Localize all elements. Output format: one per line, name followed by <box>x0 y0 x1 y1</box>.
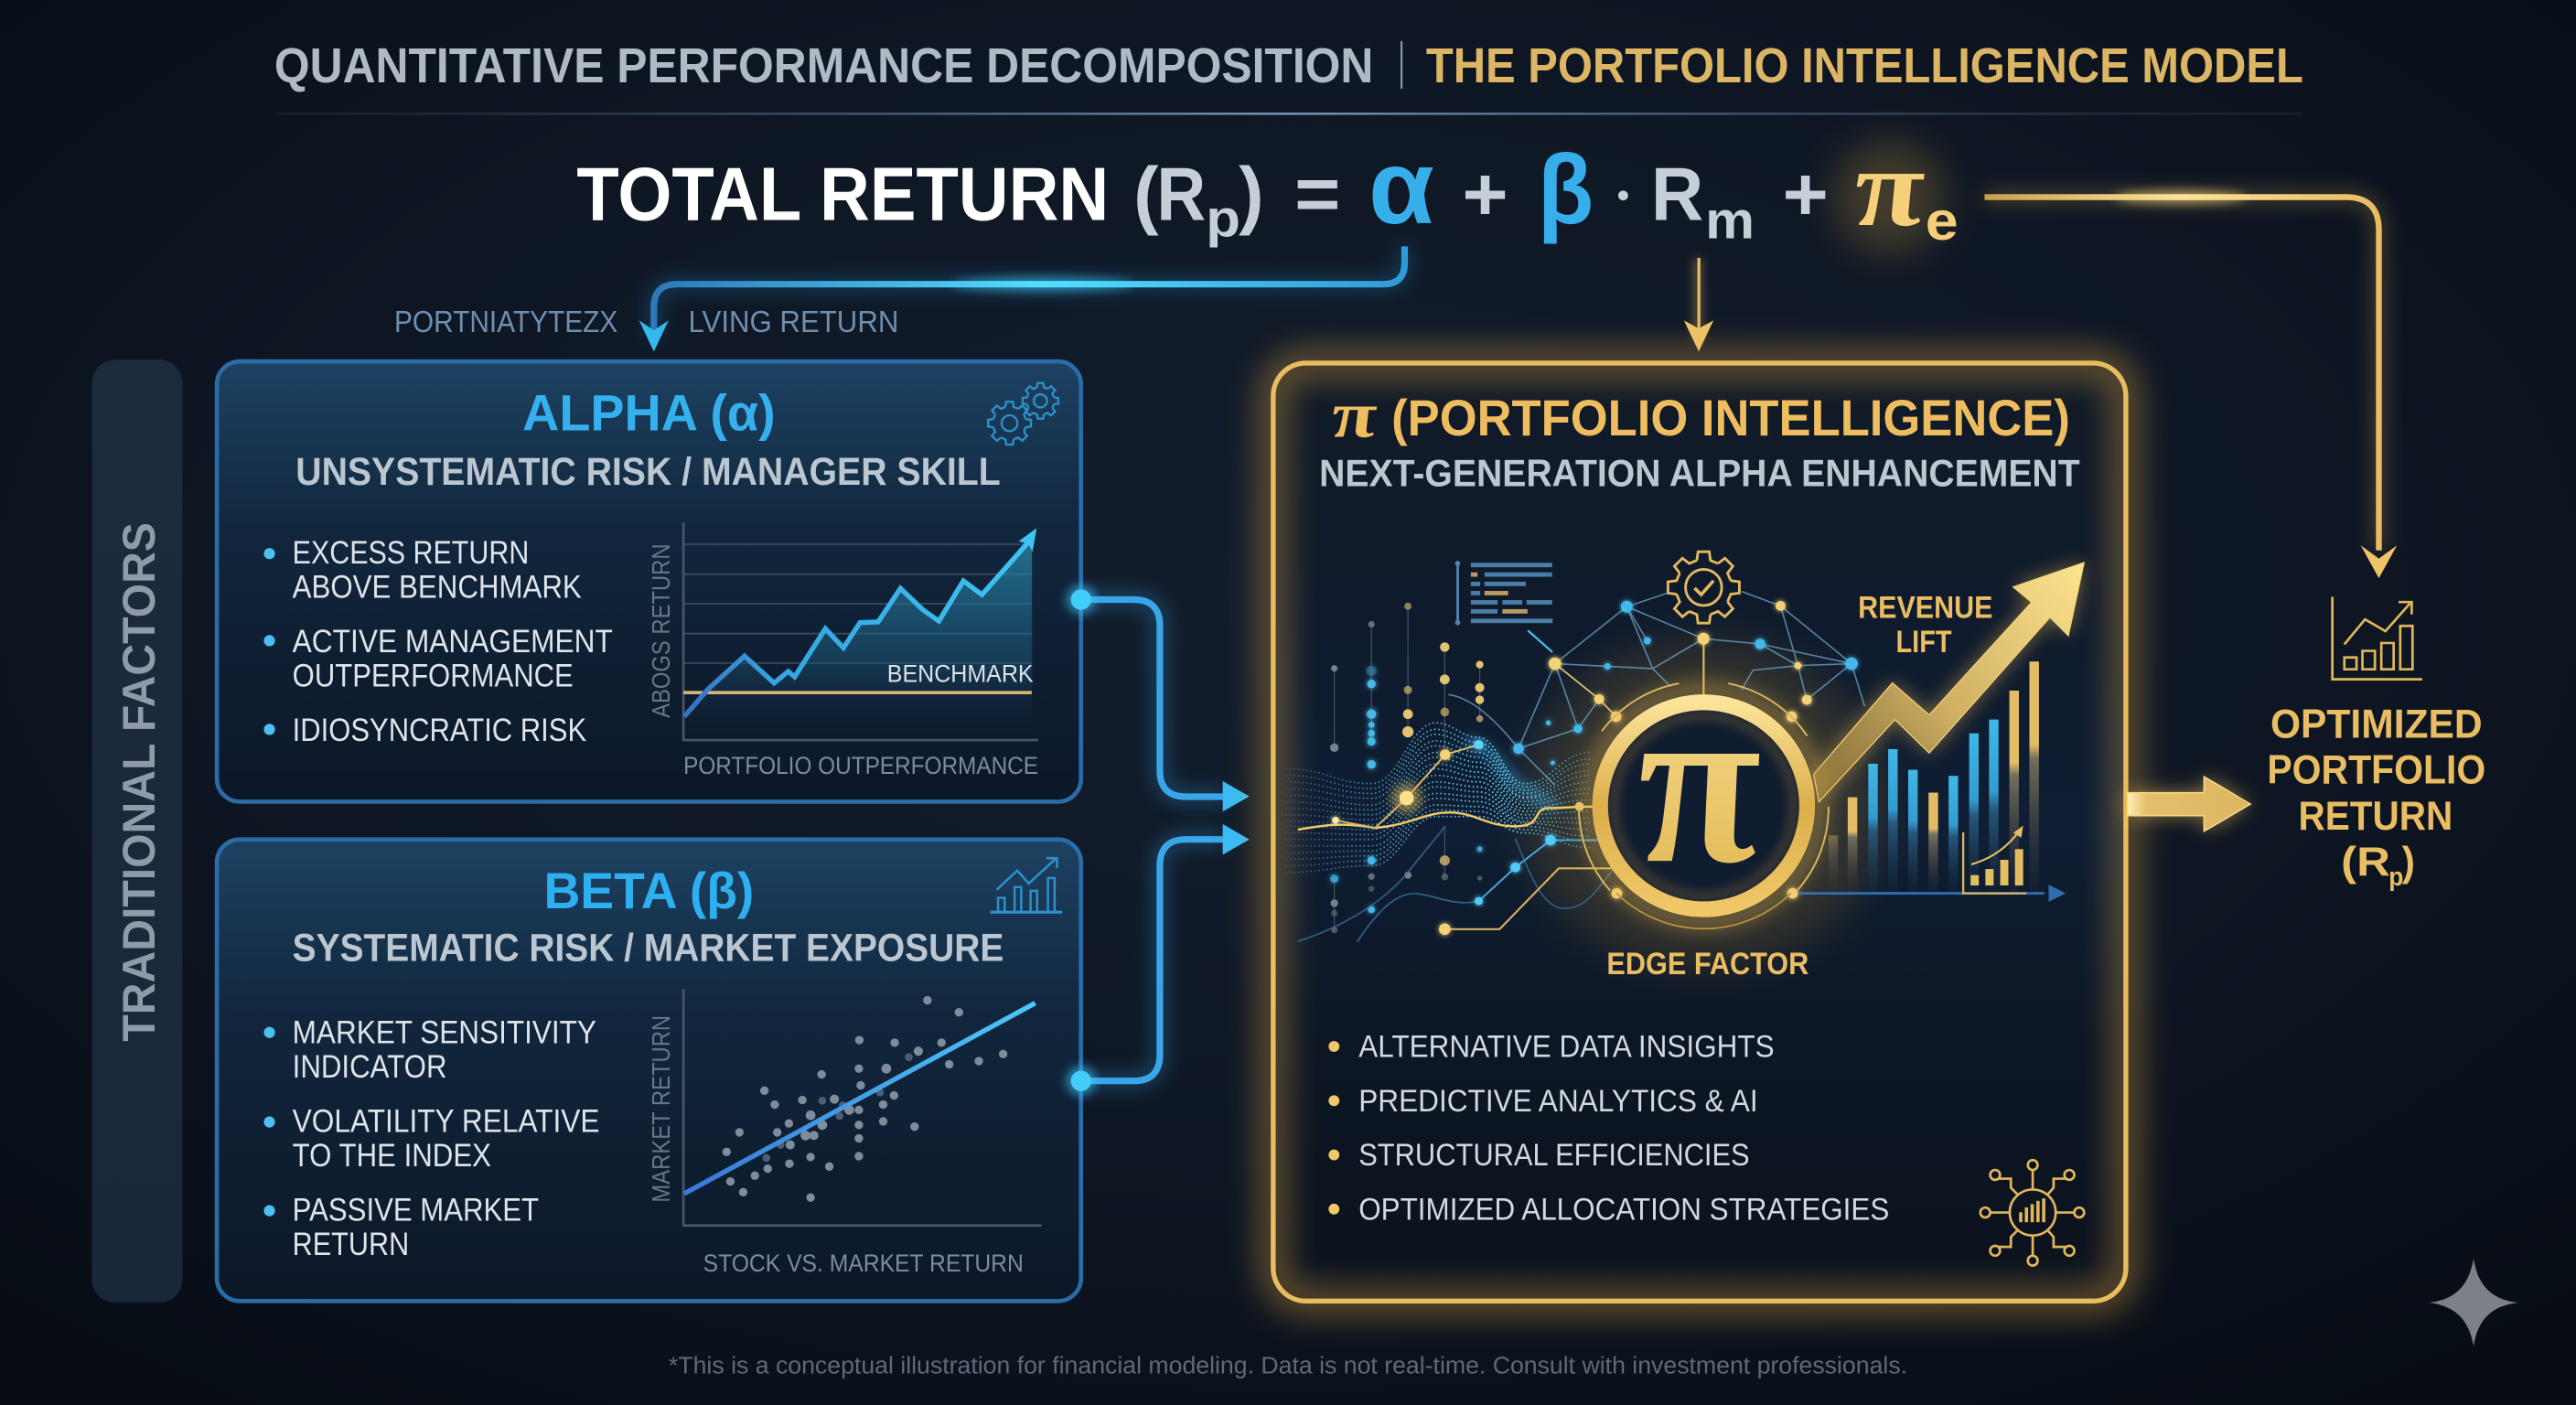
arrow: alpha panel to pi panel <box>1067 585 1250 811</box>
bullet list: pi: PREDICTIVE ANALYTICS & AI <box>1358 1084 1758 1119</box>
bullet list: alpha: IDIOSYNCRATIC RISK <box>293 713 586 748</box>
axis arrow <box>1798 885 2066 902</box>
label: portniatytezx: PORTNIATYTEZX <box>394 306 617 339</box>
label: lving return: LVING RETURN <box>688 306 898 339</box>
chart: stock vs market scatter <box>647 989 1042 1277</box>
bullet list: beta: INDICATOR <box>293 1049 446 1085</box>
chart: stock vs market scatter: MARKET RETURN <box>647 1015 675 1203</box>
bullet list: pi: OPTIMIZED ALLOCATION STRATEGIES <box>1358 1192 1889 1227</box>
label: revenue lift <box>1858 590 1992 660</box>
chart: portfolio outperformance: ABOGS RETURN <box>647 543 675 718</box>
panel: portfolio intelligence <box>1273 363 2126 1301</box>
header title: QUANTITATIVE PERFORMANCE DECOMPOSITION <box>274 38 1373 93</box>
output: optimized portfolio return <box>2267 700 2485 892</box>
formula: total return equation: + <box>1783 152 1829 237</box>
output: optimized portfolio return: (R <box>2341 838 2390 885</box>
bullet list: pi: STRUCTURAL EFFICIENCIES <box>1358 1138 1750 1173</box>
label: revenue lift: LIFT <box>1895 625 1952 660</box>
subheading: next-generation: NEXT-GENERATION ALPHA ENHANCEMENT <box>1319 453 2080 495</box>
sidebar: traditional factors: TRADITIONAL FACTORS <box>113 522 165 1042</box>
chart: stock vs market scatter: STOCK VS. MARKET RETURN <box>703 1249 1024 1277</box>
blue signal line and gold connector <box>1298 826 1614 942</box>
panel: alpha <box>217 361 1081 801</box>
bullet list: alpha: EXCESS RETURN <box>293 535 529 571</box>
output: optimized portfolio return: PORTFOLIO <box>2267 746 2485 793</box>
sidebar: traditional factors <box>92 359 182 1303</box>
arrow: beta panel to pi panel <box>1067 824 1250 1096</box>
arrow: alpha term down to alpha panel <box>639 246 1405 351</box>
output: optimized portfolio return: RETURN <box>2298 792 2453 839</box>
formula: total return equation: ( <box>1133 152 1159 237</box>
formula: total return equation: m <box>1705 191 1755 250</box>
panel: beta <box>217 840 1081 1301</box>
icon: bar chart with trend <box>991 858 1062 912</box>
formula: total return equation: e <box>1926 190 1959 252</box>
bullet list: beta <box>263 1014 600 1262</box>
illustration: data to edge factor <box>1286 552 2084 981</box>
gold signal line <box>1298 740 1598 830</box>
formula: total return equation: α <box>1368 129 1434 246</box>
formula: total return equation: ) <box>1239 152 1264 237</box>
formula: total return equation <box>576 126 1959 253</box>
bullet list: beta: RETURN <box>293 1227 409 1262</box>
bullet list: alpha: ACTIVE MANAGEMENT <box>293 624 613 660</box>
chart: portfolio outperformance: BENCHMARK <box>887 660 1034 687</box>
bullet list: beta: VOLATILITY RELATIVE <box>293 1103 600 1139</box>
header title: THE PORTFOLIO INTELLIGENCE MODEL <box>1426 38 2303 93</box>
bullet list: beta: MARKET SENSITIVITY <box>293 1014 596 1050</box>
formula: total return equation: π <box>1848 126 1933 250</box>
bullet list: beta: TO THE INDEX <box>293 1138 491 1174</box>
network graph <box>1448 592 1864 898</box>
heading: portfolio intelligence <box>1328 379 2070 452</box>
output: optimized portfolio return: OPTIMIZED <box>2270 700 2483 746</box>
formula: total return equation: R <box>1651 152 1703 237</box>
formula: total return equation: = <box>1294 152 1340 237</box>
subheading: beta: SYSTEMATIC RISK / MARKET EXPOSURE <box>293 927 1004 970</box>
subheading: alpha: UNSYSTEMATIC RISK / MANAGER SKILL <box>295 450 1001 493</box>
icon: sparkle <box>2430 1259 2518 1346</box>
formula: total return equation: R <box>1156 152 1206 237</box>
bullet list: alpha: OUTPERFORMANCE <box>293 659 574 694</box>
pi coin <box>1579 654 1829 928</box>
formula: total return equation: p <box>1206 190 1240 249</box>
bullet list: pi <box>1328 1030 1889 1227</box>
bullet list: alpha: ABOVE BENCHMARK <box>293 570 582 606</box>
heading: alpha: ALPHA (α) <box>522 385 776 442</box>
bullet list: pi: ALTERNATIVE DATA INSIGHTS <box>1358 1030 1775 1065</box>
pi coin: π <box>1621 654 1779 912</box>
arrow: revenue lift <box>1814 563 2084 802</box>
bullet list: alpha <box>263 535 613 748</box>
heading: portfolio intelligence: (PORTFOLIO INTELLIGENCE) <box>1391 390 2070 446</box>
arrow: beta term down to pi panel <box>1684 258 1713 351</box>
footnote: *This is a conceptual illustration for financial modeling. Data is not real-time. Consult with investment professionals. <box>669 1351 1907 1378</box>
bars behind arrow <box>1829 661 2039 892</box>
formula: total return equation: TOTAL RETURN <box>576 152 1109 237</box>
chart: portfolio outperformance: PORTFOLIO OUTPERFORMANCE <box>683 752 1038 779</box>
data point columns <box>1330 603 1485 933</box>
icon: circuit chip <box>1980 1160 2084 1266</box>
icon: output chart <box>2333 596 2422 680</box>
bullet list: beta: PASSIVE MARKET <box>293 1192 539 1228</box>
heading: beta: BETA (β) <box>543 863 754 919</box>
formula: total return equation: + <box>1462 152 1508 237</box>
arrow: pi panel to output <box>2128 777 2250 831</box>
label: revenue lift: REVENUE <box>1858 590 1992 625</box>
arrow: pi term to optimized return <box>1984 190 2397 578</box>
heading: portfolio intelligence: π <box>1328 379 1382 452</box>
chart: portfolio outperformance <box>647 522 1038 779</box>
icon: gears <box>988 383 1058 445</box>
icon: data list <box>1455 561 1552 626</box>
output: optimized portfolio return: p <box>2388 863 2403 892</box>
formula: total return equation: β <box>1538 134 1594 244</box>
label: edge factor: EDGE FACTOR <box>1606 947 1809 981</box>
icon: mini bar chart <box>1963 825 2026 894</box>
output: optimized portfolio return: ) <box>2402 838 2415 885</box>
icon: gear with check <box>1668 552 1739 623</box>
header title <box>274 38 2303 115</box>
dotted data wave <box>1286 723 1590 873</box>
